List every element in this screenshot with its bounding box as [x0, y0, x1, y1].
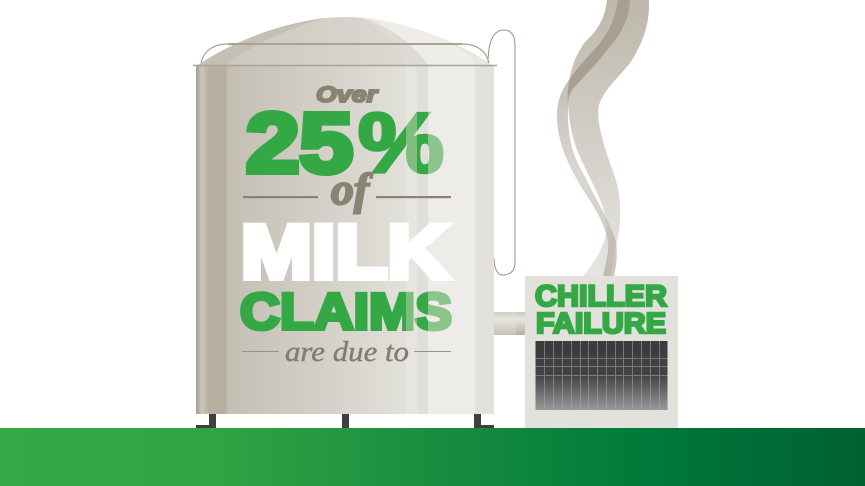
chiller cabinet — [525, 276, 678, 428]
tank body — [196, 66, 494, 414]
label: FAILURE: FAILURE — [536, 308, 666, 340]
connecting pipe — [494, 312, 525, 335]
smoke plume — [557, 0, 649, 276]
green ground band — [0, 428, 865, 486]
label: CHILLER: CHILLER — [535, 280, 667, 313]
chiller grille — [536, 341, 668, 410]
label: Over: Over — [316, 82, 379, 107]
statistic: 25%: % — [358, 96, 444, 190]
statistic: 25% — [246, 96, 444, 190]
milk tank — [193, 17, 497, 414]
coiled sight tube — [488, 30, 515, 275]
statistic: 25%: 25 — [246, 96, 353, 190]
label: are due to: are due to — [285, 336, 409, 368]
tank rim and handrail — [193, 44, 497, 66]
heading: CLAIMS: CLAIMS — [240, 283, 452, 340]
tank legs — [196, 414, 494, 428]
heading: MILK: MILK — [241, 210, 449, 295]
tank dome — [198, 17, 492, 65]
label: of: of — [331, 165, 374, 214]
chiller unit — [525, 276, 678, 428]
